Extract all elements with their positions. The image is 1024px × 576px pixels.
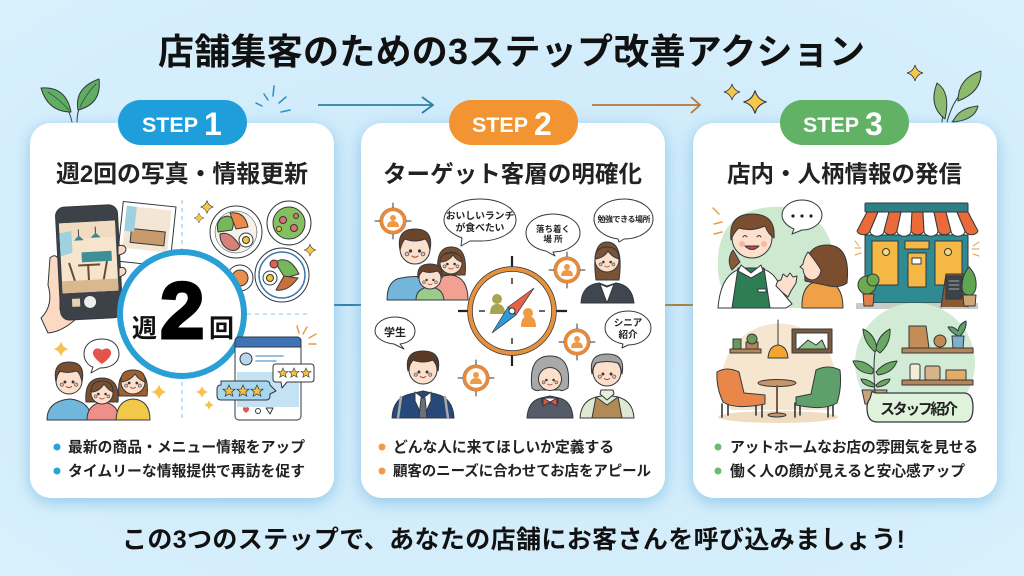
panel: step 3 [693,100,997,498]
title: 店舗集客のための3ステップ改善アクション [158,31,865,72]
sparks near post [297,326,316,344]
illustration: cafe interior [717,320,841,423]
icon: hand holding phone [41,204,126,333]
decoration: left leaves [41,79,99,122]
bubble: student [375,317,415,349]
big circle: 週2回: 週 [132,315,157,343]
icon: social post [235,337,301,420]
bubble: student: 学生 [384,325,406,339]
big circle: 週2回 [120,252,244,376]
compass [458,256,567,366]
bubble: calm place: 場 所 [543,234,563,244]
review bubbles [217,364,314,400]
step 2 badge: STEP [472,114,528,137]
people: businesswoman [581,242,634,303]
big circle: 週2回: 回 [209,315,234,343]
bubble: senior [605,311,651,348]
bubble: calm place [526,214,580,256]
people: student [392,351,454,418]
step 1 badge: 1 [204,106,222,142]
step 3 badge: STEP [803,114,859,137]
bubble: senior: シニア [614,318,643,329]
illustration: staff talking [713,200,848,308]
card 1 background [30,123,334,498]
dashed dividers [182,200,310,420]
decoration: sparkles [724,65,923,114]
arrow: step 1 to 2 [318,97,433,113]
icon: polaroid photo [117,201,176,267]
sparkles near food [194,200,316,256]
arrow: step 2 to 3 [592,97,700,113]
heading 1: 週2回の写真・情報更新 [56,161,308,188]
decoration: burst lines [256,86,290,112]
step 1 badge: STEP [142,114,198,137]
illustration: shelf and plant: スタッフ紹介 [880,401,958,418]
decoration: right leaves [934,71,981,122]
step 3 badge: 3 [865,106,883,142]
step 3 badge [780,100,909,145]
big circle: 週2回: 2 [160,266,204,355]
people: grandfather [580,354,634,418]
people: family [387,229,468,300]
bullet list 3 [714,438,978,480]
bullet list 1 [54,438,305,480]
target icons [375,203,595,396]
step 2 badge [449,100,578,145]
bubble: lunch: おいしいランチ [446,210,514,222]
icon: heart bubble [84,339,119,373]
bullet list 2 [378,439,652,480]
panel: step 2 [361,100,665,498]
card 2 background [361,123,665,498]
bubble: study place [594,199,653,242]
step 2 badge: 2 [534,106,552,142]
card 3 background [693,123,997,498]
bubble: calm place: 落ち着く [536,224,570,234]
illustration: shelf and plant [853,303,975,423]
bubble: study place: 勉強できる場所 [598,214,650,224]
sparkles near family [54,342,214,410]
bubble: lunch [444,199,516,246]
illustration: storefront [855,203,979,309]
bullet list 2: どんな人に来てほしいか定義する [393,439,614,456]
closing message: この3つのステップで、あなたの店舗にお客さんを呼び込みましょう! [122,526,905,554]
people: grandmother [527,356,573,418]
bullet list 3: アットホームなお店の雰囲気を見せる [730,438,978,456]
step 1 badge [118,100,247,145]
heading 3: 店内・人柄情報の発信 [727,161,962,187]
bubble: lunch: が食べたい [456,221,505,234]
heading 2: ターゲット客層の明確化 [383,161,642,187]
bullet list 1: 最新の商品・メニュー情報をアップ [68,438,305,456]
panel: step 1 [30,100,334,498]
connector lines [334,304,693,306]
bubble: senior: 紹介 [618,329,638,341]
bullet list 1: タイムリーな情報提供で再訪を促す [68,462,305,480]
icon: happy family [47,362,150,420]
icon: food plates [210,201,311,302]
bullet list 2: 顧客のニーズに合わせてお店をアピール [393,462,652,480]
bullet list 3: 働く人の顔が見えると安心感アップ [730,462,965,480]
